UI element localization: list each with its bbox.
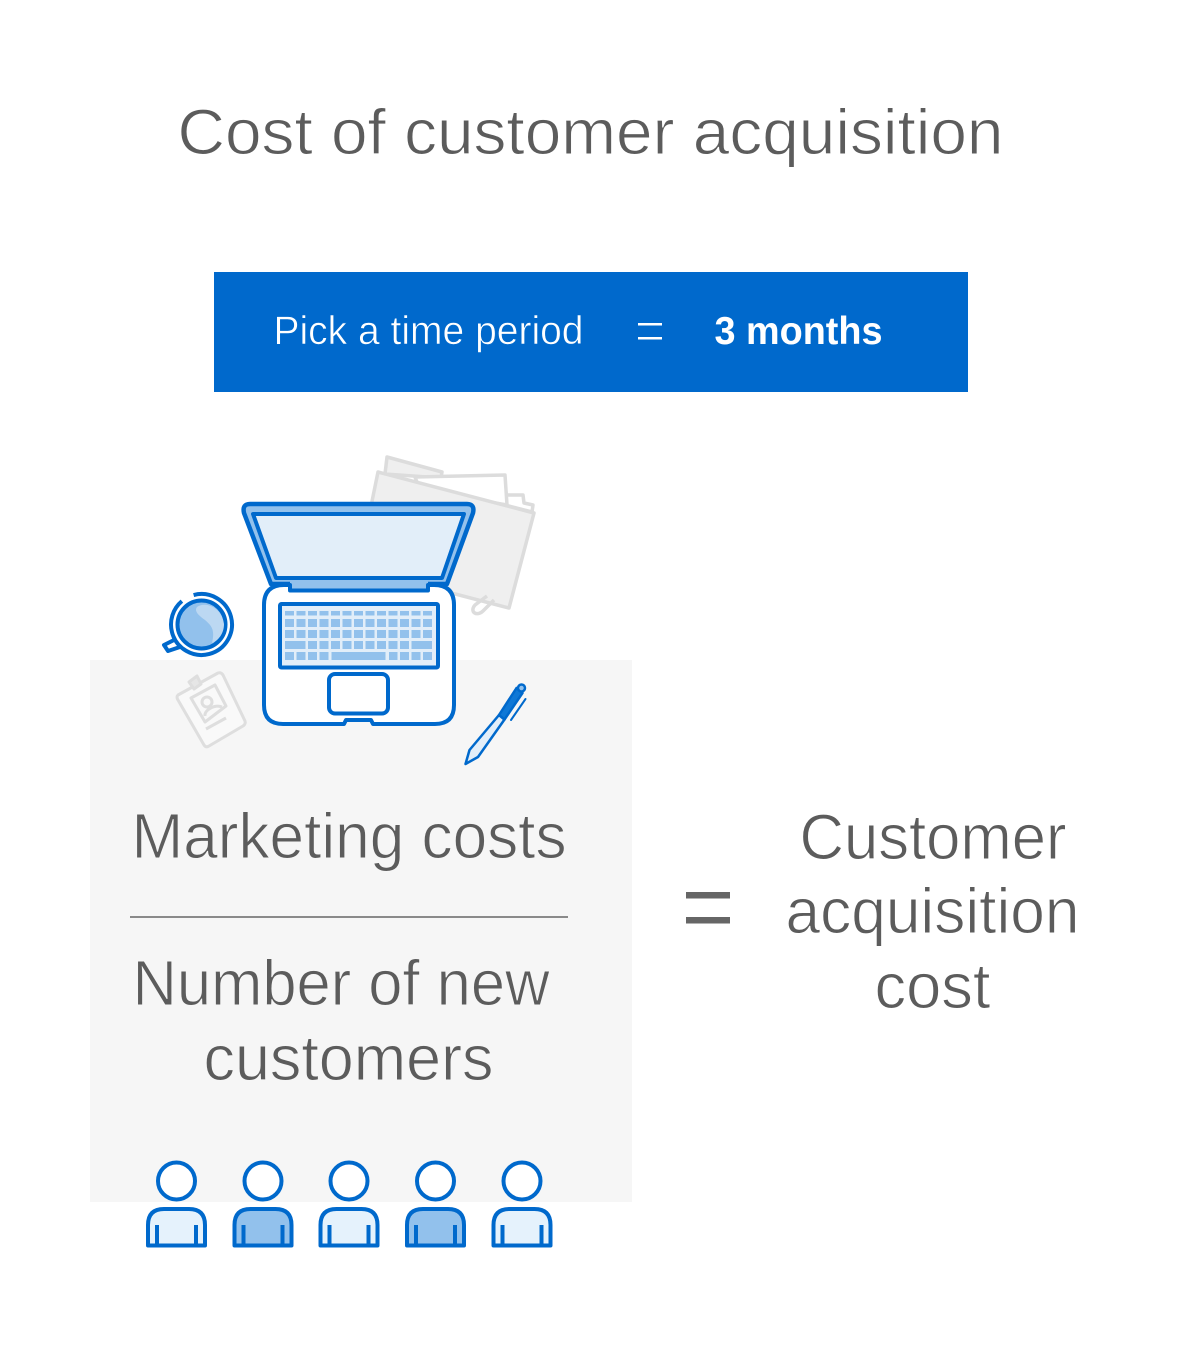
icon: id badge — [177, 673, 245, 747]
banner: time period — [214, 272, 968, 392]
laptop base — [264, 585, 454, 724]
denominator text: Number of new — [132, 947, 550, 1019]
person 2 — [234, 1162, 292, 1246]
large equals sign — [686, 892, 730, 924]
laptop screen — [253, 514, 464, 578]
laptop keyboard — [280, 604, 438, 668]
banner label: Pick a time period — [274, 309, 584, 353]
result text: Customer — [800, 801, 1066, 873]
fraction divider — [130, 916, 568, 918]
banner value: 3 months — [714, 310, 882, 353]
person 5 — [494, 1162, 550, 1246]
laptop lid — [244, 504, 473, 584]
icon: folder with papers — [360, 457, 534, 614]
people icons row — [148, 1162, 550, 1246]
person 1 — [148, 1162, 205, 1246]
numerator text: Marketing costs — [132, 800, 566, 872]
result text: acquisition — [786, 875, 1080, 947]
person 4 — [407, 1162, 464, 1246]
result text — [786, 801, 1080, 1022]
laptop trackpad — [329, 674, 388, 714]
person 3 — [320, 1162, 378, 1246]
icon: laptop — [244, 504, 473, 724]
icon: pen — [466, 684, 526, 764]
denominator text — [132, 947, 550, 1094]
denominator text: customers — [204, 1022, 494, 1094]
title: Cost of customer acquisition — [178, 96, 1004, 168]
laptop hinge — [290, 578, 428, 591]
panel: formula background — [90, 660, 632, 1202]
banner equals sign — [638, 323, 662, 340]
icon: coffee cup — [164, 587, 239, 662]
result text: cost — [874, 950, 991, 1022]
